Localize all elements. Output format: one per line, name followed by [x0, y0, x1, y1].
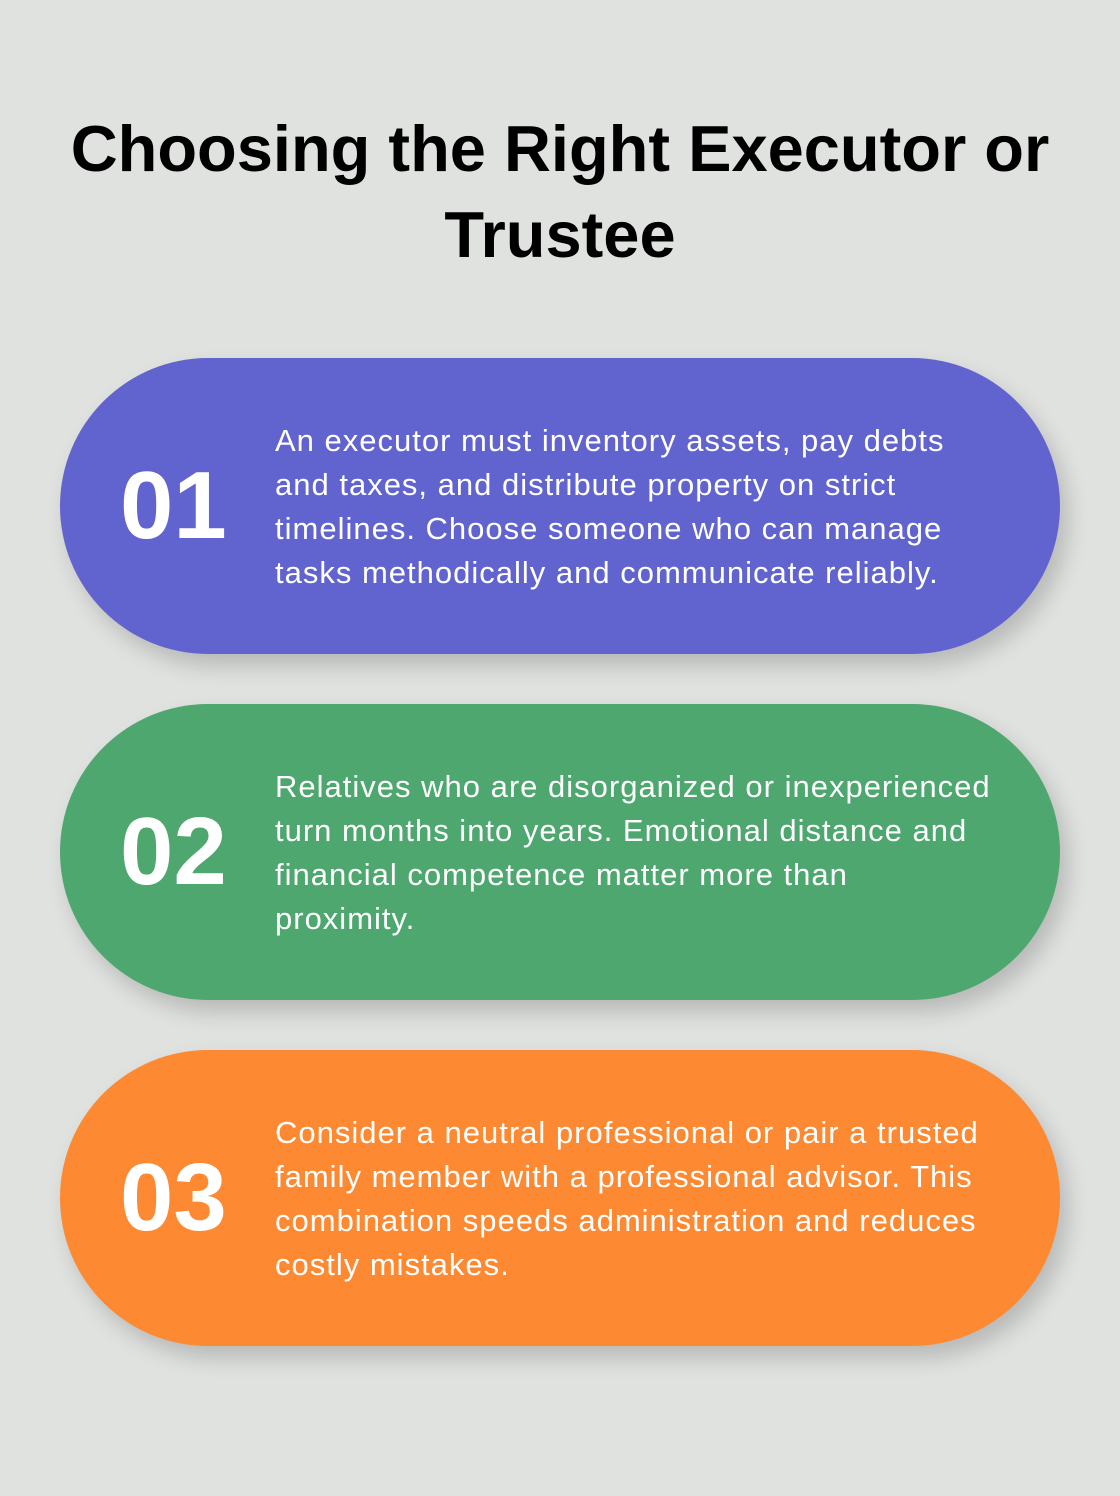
number 01: 01	[120, 452, 227, 559]
text 01: tasks methodically and communicate reliably.	[275, 555, 939, 590]
title: Choosing the Right Executor or	[71, 112, 1049, 185]
text 01: and taxes, and distribute property on strict	[275, 467, 896, 502]
title	[71, 112, 1049, 271]
text 02	[275, 769, 991, 936]
number 02: 02	[120, 798, 227, 905]
text 02: Relatives who are disorganized or inexperienced	[275, 769, 991, 804]
text 01	[275, 423, 944, 590]
text 03: family member with a professional advisor. This	[275, 1159, 973, 1194]
panel: step 02	[60, 704, 1060, 1000]
panel: step 01	[60, 358, 1060, 654]
text 02: financial competence matter more than	[275, 857, 848, 892]
text 03	[275, 1115, 979, 1282]
panel: step 03	[60, 1050, 1060, 1346]
number 03: 03	[120, 1144, 227, 1251]
text 02: turn months into years. Emotional distance and	[275, 813, 967, 848]
text 03: costly mistakes.	[275, 1247, 510, 1282]
text 03: combination speeds administration and reduces	[275, 1203, 977, 1238]
text 02: proximity.	[275, 901, 415, 936]
text 01: An executor must inventory assets, pay debts	[275, 423, 944, 458]
title: Trustee	[444, 198, 676, 271]
text 01: timelines. Choose someone who can manage	[275, 511, 942, 546]
text 03: Consider a neutral professional or pair a trusted	[275, 1115, 979, 1150]
